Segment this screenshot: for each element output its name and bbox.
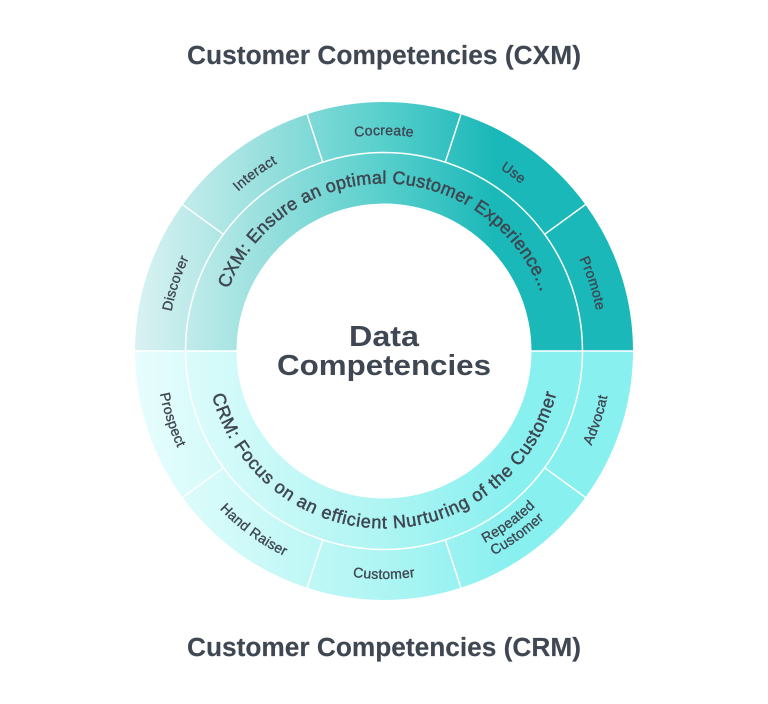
segment: Use <box>446 114 586 234</box>
segment: Interact: Interact <box>232 156 278 191</box>
panel: CRM inner ring <box>186 352 582 549</box>
segment: Customer <box>308 540 461 600</box>
label: CRM objective: CRM: Focus on an efficient Nurturing of the Customer <box>213 390 556 529</box>
title: Customer Competencies (CXM): Customer Competencies (CXM) <box>187 42 581 70</box>
segment: Cocreate <box>307 102 461 162</box>
panel: CXM outer ring <box>135 102 633 350</box>
segment: Cocreate: Cocreate <box>354 126 413 137</box>
segment: Prospect: Prospect <box>160 392 186 448</box>
segment: Use: Use <box>502 162 524 183</box>
center heading: Data Competencies <box>277 321 491 382</box>
panel: CRM outer ring <box>135 352 633 600</box>
segment: Customer: Customer <box>354 568 414 580</box>
segment: Promote <box>546 204 633 350</box>
panel: CXM inner ring <box>186 153 582 350</box>
segment: Repeated Customer: Customer <box>491 513 543 554</box>
center heading: Data Competencies: Data <box>349 321 420 353</box>
segment: Repeated Customer <box>446 468 586 588</box>
segment: Repeated Customer: Repeated <box>481 500 535 543</box>
segment: Advocat <box>546 352 633 497</box>
segment: Prospect <box>135 352 222 497</box>
label: CXM objective: CXM: Ensure an optimal Customer Experience... <box>218 170 542 291</box>
segment: Discover <box>135 205 222 350</box>
segment: Hand Raiser <box>183 468 322 588</box>
segment: Advocat: Advocat <box>584 394 608 446</box>
segment: Hand Raiser: Hand Raiser <box>220 502 288 556</box>
segment: Discover: Discover <box>162 255 188 311</box>
segment: Interact <box>182 114 322 234</box>
center heading: Data Competencies: Competencies <box>277 350 491 382</box>
title: Customer Competencies (CRM): Customer Competencies (CRM) <box>187 634 581 662</box>
segment: Promote: Promote <box>580 256 604 310</box>
